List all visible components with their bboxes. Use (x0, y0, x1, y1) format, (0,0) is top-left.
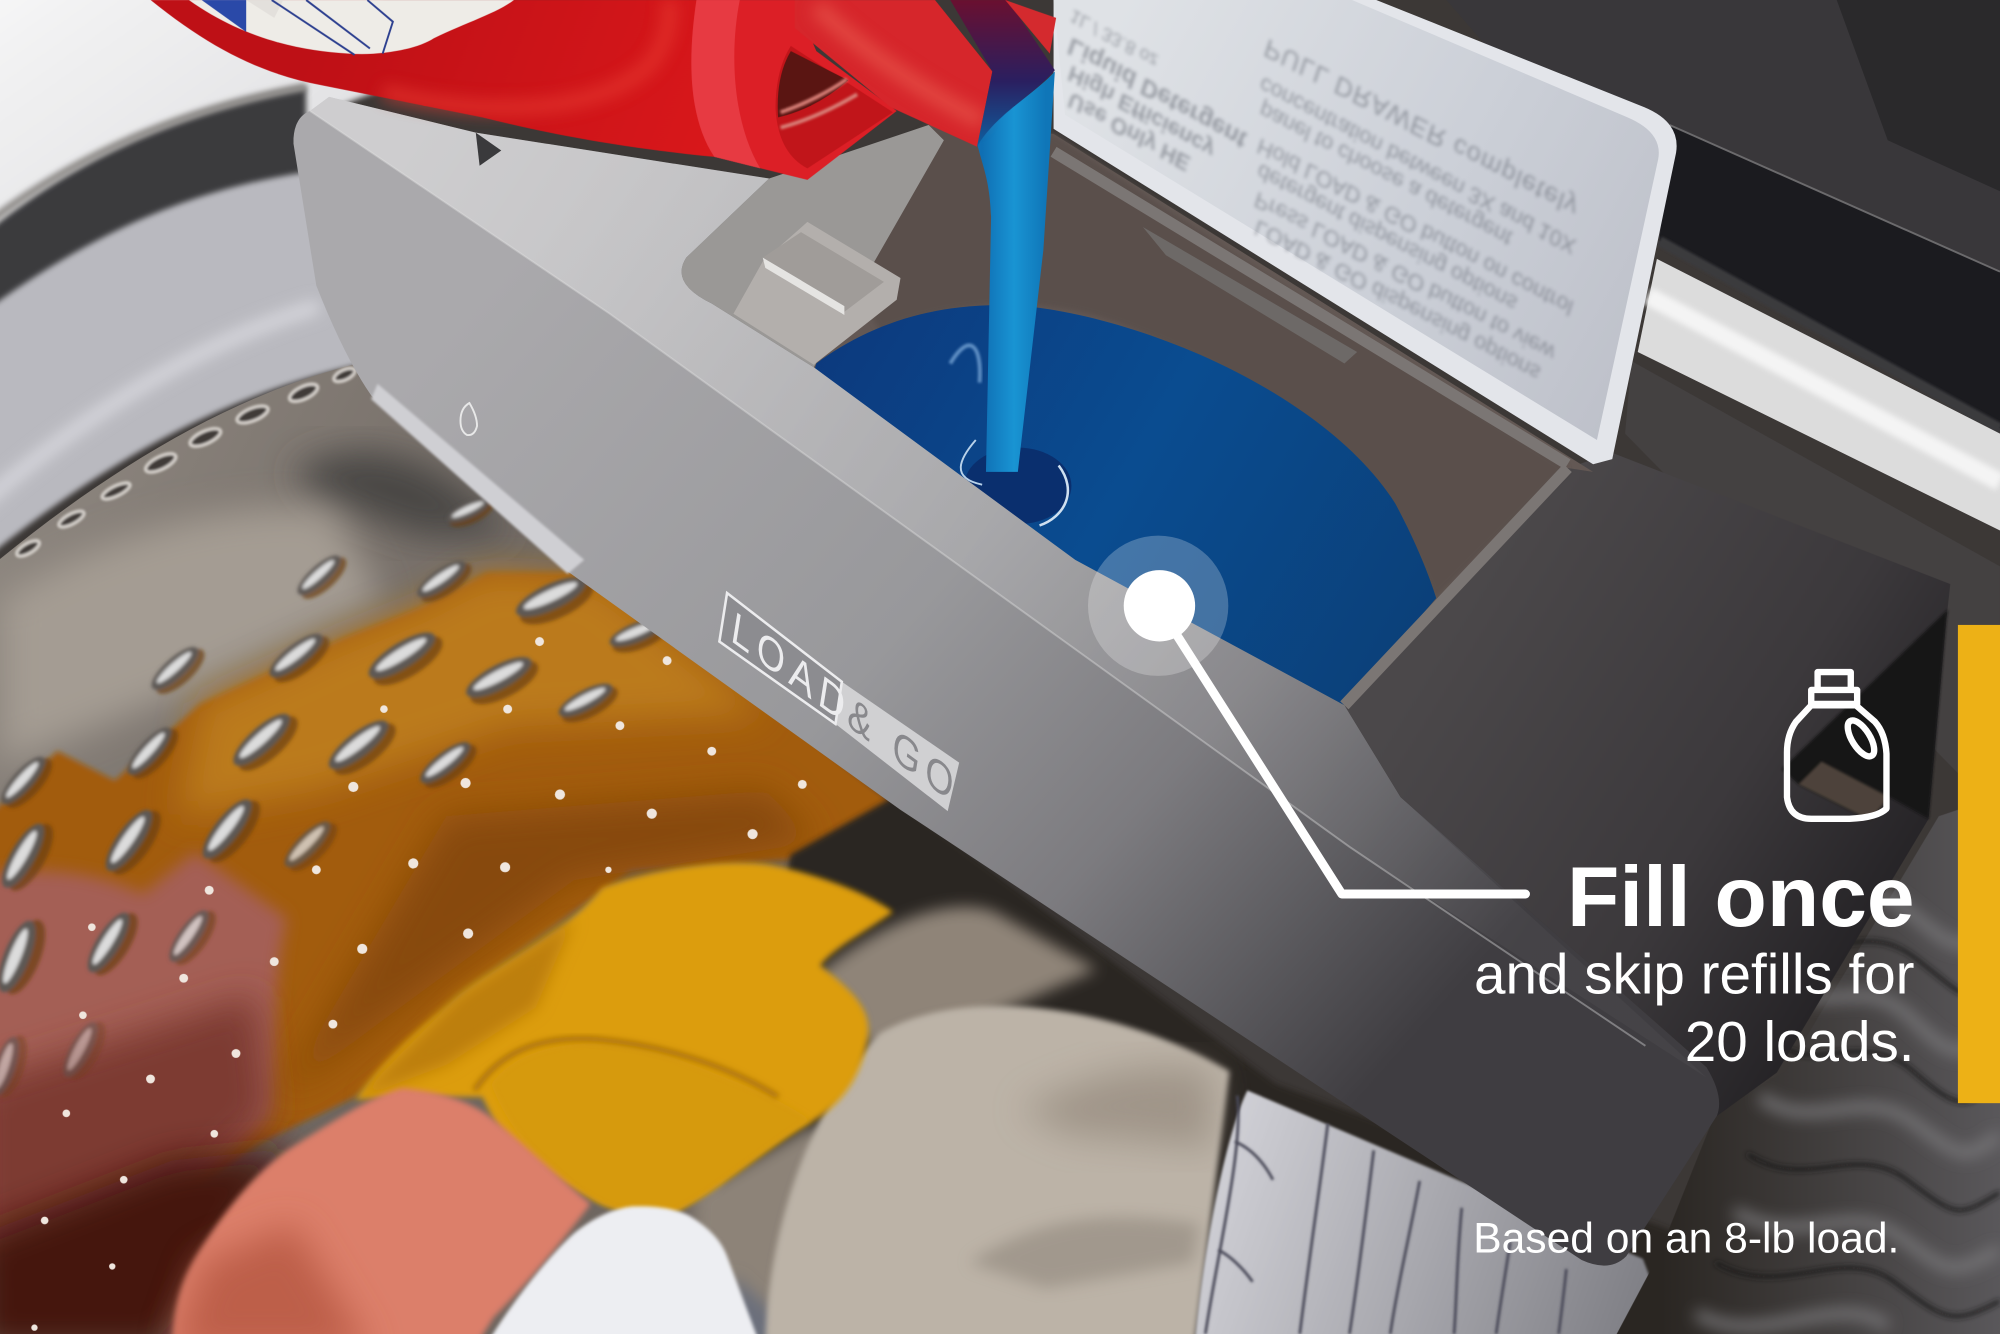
icon: detergent bottle (1787, 672, 1886, 819)
drawer: blue detergent pool (814, 305, 1436, 705)
load and go badge (719, 593, 962, 816)
translucent fold-up lid: concentration between 3X and 10X (1257, 72, 1579, 259)
drawer: white edge strip (371, 384, 584, 574)
drawer: siphon cap housing (682, 125, 944, 367)
translucent fold-up lid: 1L / 33.8 oz (1067, 5, 1160, 72)
scene: laundry clothes (172, 791, 2000, 1334)
body text second line: 20 loads. (1685, 1010, 1915, 1073)
scene: washer console at top right (1446, 0, 2000, 816)
translucent fold-up lid: Liquid Detergent (1065, 31, 1250, 154)
translucent fold-up lid: LOAD & GO dispensing options (1251, 215, 1543, 386)
body text: and skip refills for (1474, 942, 1915, 1005)
footnote: Based on an 8-lb load. (1473, 1214, 1899, 1262)
drawer: brown wedge behind bottle icon (1798, 761, 1889, 820)
translucent fold-up lid: Hold LOAD & GO button on control (1254, 133, 1576, 321)
translucent fold-up lid: Press LOAD & GO button to view (1251, 187, 1559, 366)
drawer: small notch (476, 133, 501, 166)
yellow accent bar (1958, 625, 2000, 1103)
scene: orange and pink reflections in the drum (0, 573, 895, 1334)
scene: drum perforations (0, 365, 807, 1331)
translucent fold-up lid: High Efficiency (1065, 60, 1218, 163)
drawer: tab below lid (1143, 227, 1357, 363)
callout leader line and marker (1088, 536, 1526, 894)
drawer: shadowed corner under bottle icon (1782, 610, 1948, 820)
drawer: droplet icon (460, 403, 477, 435)
translucent fold-up lid: PULL DRAWER completely (1260, 33, 1582, 224)
translucent fold-up lid: panel to choose a detergent (1257, 97, 1515, 252)
drawer: dark upper surface (1344, 453, 1950, 1116)
drawer: grey rim around well (1054, 152, 1568, 705)
translucent fold-up lid: Use Only HE (1065, 87, 1193, 176)
blue detergent stream (977, 71, 1055, 472)
red detergent bottle (151, 0, 1056, 180)
heading: fill once: Fill once (1567, 849, 1915, 945)
load and go badge: LOAD (728, 603, 854, 736)
translucent fold-up lid (1054, 0, 1677, 464)
drawer: crease highlight (310, 111, 1645, 1046)
translucent fold-up lid: detergent dispensing options (1254, 159, 1520, 317)
drawer: stainless front panel (293, 97, 1719, 1266)
drawer: dark well back wall (816, 125, 1568, 599)
drawer: detergent well interior (807, 125, 1593, 705)
drawer: bright lip along the well (310, 97, 1707, 1078)
load and go badge: & GO (845, 688, 962, 816)
detergent swirl (950, 345, 1071, 525)
